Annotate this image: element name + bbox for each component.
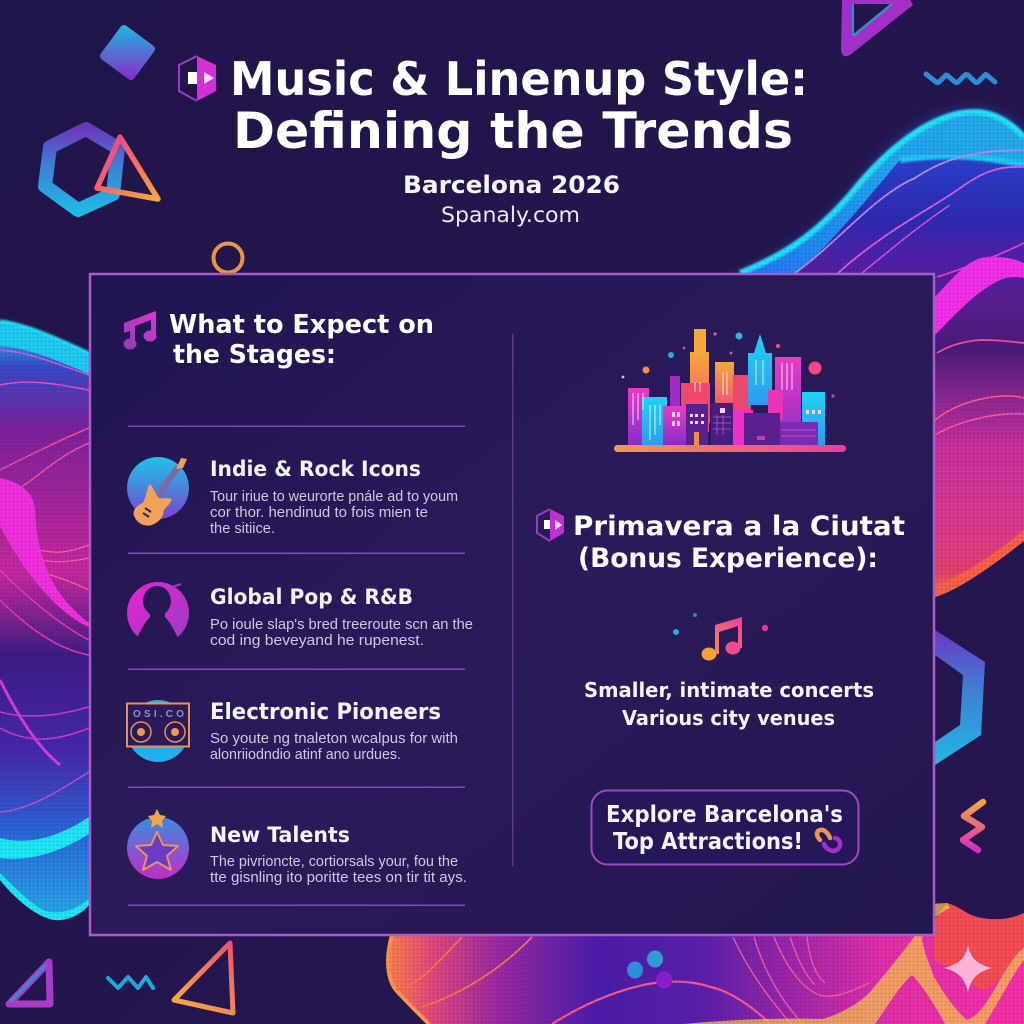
decoration: triangle [97, 137, 158, 199]
decoration: rounded diamond [104, 29, 151, 76]
item description: the sitiice. [210, 521, 275, 537]
icon: star [127, 809, 189, 879]
heading: what to expect: What to Expect on [169, 310, 434, 340]
icon: music note with dots [673, 613, 768, 660]
icon: star sparkle [944, 945, 992, 992]
decoration: bottom left triangle [9, 962, 50, 1004]
icon: music notes heading [124, 311, 156, 350]
list item: new talents [127, 809, 467, 886]
icon: primavera hexagon logo [537, 509, 564, 541]
item title: Electronic Pioneers [210, 700, 441, 725]
icon: singer silhouette [127, 582, 189, 650]
item description: Tour iriue to weurorte pnále ad to youm [210, 489, 458, 505]
decoration: top right squiggle [926, 74, 995, 82]
item title: Indie & Rock Icons [210, 457, 421, 481]
button: explore barcelona: Explore Barcelona's [606, 802, 843, 828]
button: explore barcelona [592, 790, 858, 864]
decoration: right zigzag [963, 802, 983, 850]
decoration: bottom squiggle [108, 977, 153, 988]
text: bonus details: Smaller, intimate concerts [584, 678, 874, 702]
icon: synth machine: OSI.CO [133, 709, 184, 720]
icon: chain link [817, 830, 840, 851]
title: Defining the Trends [233, 102, 793, 160]
item description: cod ing beveyand he rupenest. [210, 633, 424, 649]
decoration: hexagon ring [45, 129, 118, 210]
item description: tte gisnling ito poritte tees on tir tit ays. [210, 870, 467, 886]
text: bonus details: Various city venues [622, 706, 835, 730]
illustration: city skyline [614, 329, 846, 452]
item description: So youte ng tnaleton wcalpus for with [210, 731, 458, 747]
wave: left [0, 321, 89, 920]
heading: primavera a la ciutat: (Bonus Experience): [578, 543, 878, 574]
list item: indie and rock [127, 457, 458, 537]
decoration: right hexagon [935, 630, 985, 765]
item title: Global Pop & R&B [210, 585, 413, 609]
wave: bottom [388, 903, 1024, 1024]
decoration: circle ring [214, 244, 242, 272]
item description [210, 489, 458, 537]
item description [210, 854, 467, 886]
item description: alonriiodndio atinf ano urdues. [210, 747, 401, 763]
list item: electronic [127, 700, 458, 763]
item title: New Talents [210, 823, 350, 847]
panel: main card [90, 274, 934, 935]
icon: title hexagon logo [179, 56, 216, 101]
button: explore barcelona: Top Attractions! [613, 829, 803, 855]
list item: global pop [127, 582, 473, 650]
icon: synth machine [127, 700, 189, 762]
title [230, 52, 808, 160]
item description [210, 731, 458, 763]
decoration: three dots [627, 950, 672, 988]
item description: The pivrioncte, cortiorsals your, fou the [210, 854, 458, 870]
wave: top right [720, 112, 1024, 597]
item description: cor thor. hendinud to fois mien te [210, 505, 428, 521]
heading: what to expect [169, 310, 434, 370]
item description [210, 617, 473, 649]
item description: Po ioule slap's bred treeroute scn an the [210, 617, 473, 633]
heading: primavera a la ciutat: Primavera a la Ciutat [573, 511, 905, 542]
heading: what to expect: the Stages: [173, 340, 336, 370]
subtitle: Barcelona 2026 [403, 171, 620, 199]
decoration: orange triangle [174, 943, 233, 1013]
heading: primavera a la ciutat [573, 511, 905, 574]
icon: guitar [127, 457, 189, 524]
source: Spanaly.com [441, 203, 580, 227]
decoration: top right triangle [841, 0, 913, 56]
title: Music & Linenup Style: [230, 52, 808, 106]
text: bonus details [584, 678, 874, 730]
